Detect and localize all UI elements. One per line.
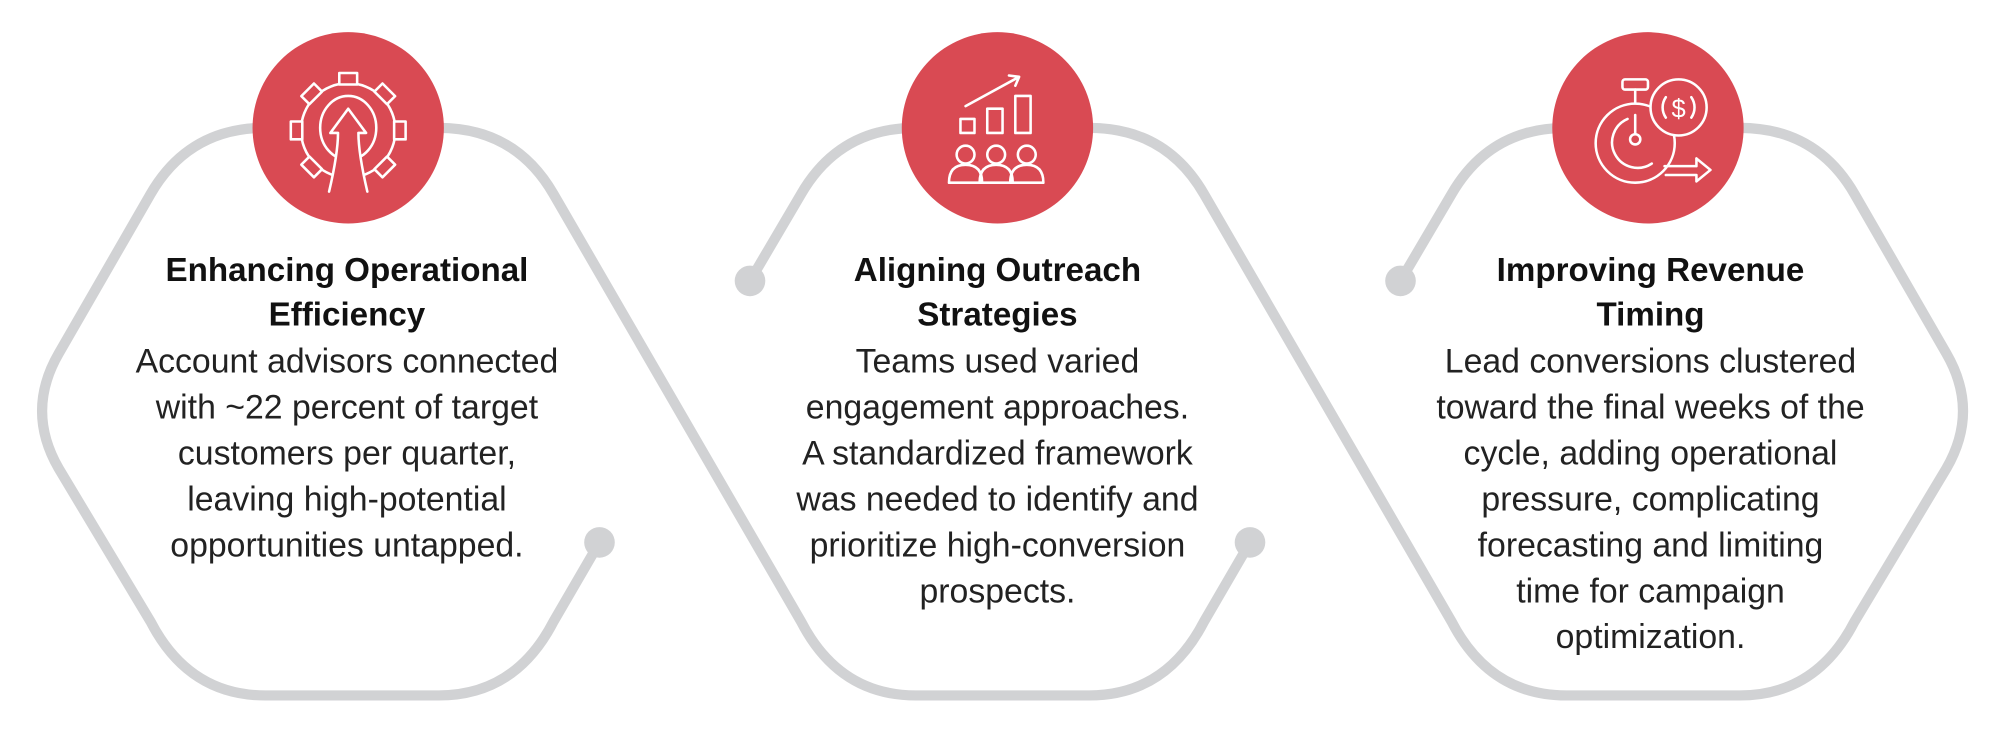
text block: Enhancing Operational Efficiency: opportunities untapped.: [170, 526, 524, 564]
text block: Enhancing Operational Efficiency: with ~22 percent of target: [155, 389, 539, 427]
text block: Enhancing Operational Efficiency: [136, 252, 558, 564]
text block: Aligning Outreach Strategies: Teams used varied: [856, 343, 1139, 381]
text block: Aligning Outreach Strategies: prioritize high-conversion: [810, 526, 1185, 564]
text block: Enhancing Operational Efficiency: Account advisors connected: [136, 343, 558, 381]
hexagon outline: middle-top and right chain: [750, 128, 1963, 695]
text block: Improving Revenue Timing: forecasting and limiting: [1478, 526, 1823, 564]
icon: stopwatch with dollar: $: [1671, 96, 1686, 124]
text block: Improving Revenue Timing: time for campaign: [1516, 572, 1785, 610]
text block: Improving Revenue Timing: Improving Revenue: [1497, 252, 1804, 289]
text block: Enhancing Operational Efficiency: Enhancing Operational: [165, 252, 528, 289]
text block: Aligning Outreach Strategies: Aligning Outreach: [854, 252, 1141, 289]
text block: Improving Revenue Timing: toward the final weeks of the: [1436, 389, 1865, 427]
text block: Aligning Outreach Strategies: [795, 252, 1199, 610]
text block: Enhancing Operational Efficiency: customers per quarter,: [178, 435, 516, 473]
hexagon outline: left and middle-bottom chain: [42, 128, 1250, 695]
text block: Aligning Outreach Strategies: was needed to identify and: [795, 480, 1199, 518]
text block: Enhancing Operational Efficiency: Efficiency: [269, 297, 426, 334]
text block: Aligning Outreach Strategies: prospects.: [919, 572, 1075, 610]
icon: gear with arrow: [253, 32, 444, 224]
text block: Improving Revenue Timing: Lead conversions clustered: [1445, 343, 1856, 381]
text block: Enhancing Operational Efficiency: leaving high-potential: [187, 480, 507, 518]
text block: Aligning Outreach Strategies: A standardized framework: [802, 435, 1193, 473]
text block: Improving Revenue Timing: Timing: [1596, 297, 1705, 334]
text block: Improving Revenue Timing: cycle, adding operational: [1464, 435, 1837, 473]
text block: Aligning Outreach Strategies: Strategies: [917, 297, 1078, 334]
text block: Improving Revenue Timing: pressure, complicating: [1481, 480, 1820, 518]
text block: Aligning Outreach Strategies: engagement approaches.: [806, 389, 1189, 427]
connector dots: [584, 266, 1416, 558]
text block: Improving Revenue Timing: [1436, 252, 1865, 656]
icon: stopwatch with dollar: [1552, 32, 1744, 224]
icon: growth chart with team: [902, 32, 1093, 224]
text block: Improving Revenue Timing: optimization.: [1556, 618, 1745, 656]
